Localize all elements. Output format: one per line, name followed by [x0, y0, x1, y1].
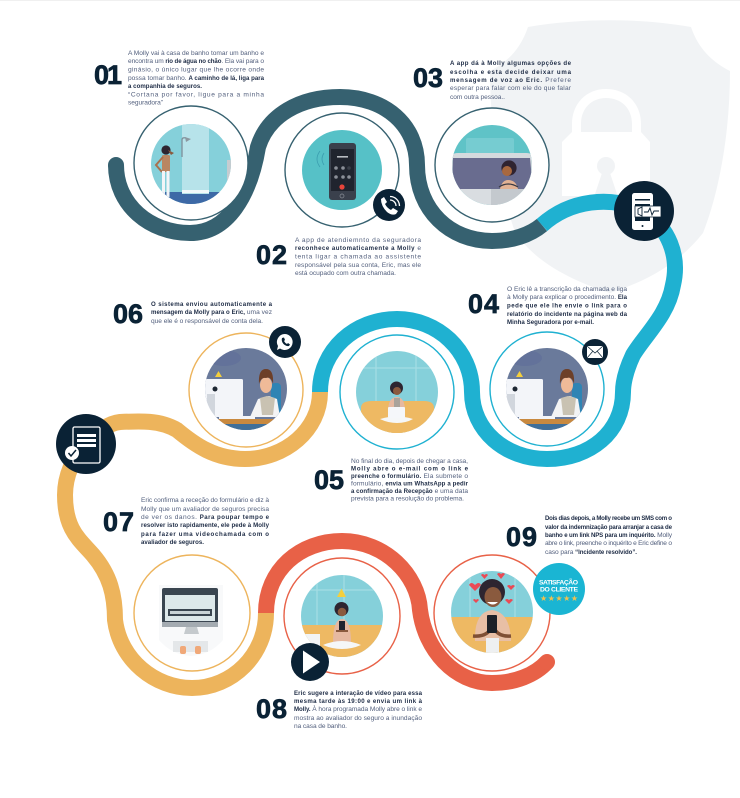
step 08 text: mostra ao avaliador do seguro a inundação	[294, 715, 422, 722]
step 06 text: O sistema enviou automaticamente a	[151, 301, 273, 308]
icon: hearts	[469, 573, 515, 604]
step 07 text: Molly que um avaliador de seguros precisa	[141, 506, 269, 513]
step 09 text: caso para “Incidente resolvido”.	[545, 549, 637, 556]
path segment: blue (steps 4-5)	[320, 202, 675, 459]
step 04 text: Minha Seguradora por e-mail.	[507, 319, 594, 326]
icon: sound waves	[317, 151, 324, 167]
step 09 text	[545, 515, 673, 556]
step 05 text: a confirmação da Recepção e uma data	[351, 488, 468, 495]
icon: video play button	[291, 643, 329, 681]
step 05 text: Molly abre o e-mail com o link e	[351, 466, 469, 472]
step 08 number: 08	[256, 694, 287, 724]
step 01 text: seguradora”	[128, 100, 163, 106]
step 04 number: 04	[468, 289, 499, 319]
step 01 illustration: flooded bathroom	[134, 106, 248, 220]
step 02 illustration: phone call	[285, 113, 399, 227]
step 02 text: reconhece automaticamente a Molly e	[295, 245, 421, 252]
icon: voice message on phone	[614, 181, 674, 241]
step 02 number: 02	[256, 240, 287, 270]
step 07 text: de ver os danos. Para poupar tempo e	[141, 514, 270, 521]
step 09 text: banho e um link NPS para um inquérito. Molly	[545, 532, 673, 539]
step 03 text: A app dá à Molly algumas opções de	[450, 60, 572, 67]
step 09 text: valor da indemnização para arranjar a casa de	[545, 524, 673, 531]
step 08 text: Molly. À hora programada Molly abre o link e	[294, 704, 422, 713]
step 03 text: com outra pessoa..	[450, 94, 505, 101]
icon: warning	[337, 588, 346, 597]
step 06 text	[151, 301, 273, 325]
step 09 number: 09	[506, 522, 537, 552]
icon: WhatsApp badge	[269, 326, 301, 358]
step 07 text: avaliador de seguros.	[141, 539, 204, 546]
step 05 number: 05	[314, 465, 344, 495]
step 03 text	[450, 60, 572, 101]
step 04 text	[507, 286, 628, 326]
step 07 number: 07	[103, 507, 134, 537]
step 02 text: responsável pela sua conta, Eric, mas ele	[295, 262, 421, 269]
step 01 number: 01	[94, 60, 122, 90]
step 05 text	[351, 458, 469, 502]
badge: customer satisfaction: SATISFAÇÃO	[539, 578, 578, 586]
step 04 text: relatório do incidente na página web da	[507, 311, 628, 318]
step 02 text: está ocupado com outra chamada.	[295, 270, 396, 277]
step 07 text	[141, 497, 270, 546]
step 08 text	[294, 690, 423, 730]
step 06 text: que ele é o responsável de conta dela.	[151, 318, 263, 325]
path segment: dark teal (steps 1-3)	[108, 97, 542, 241]
step 07 illustration: video call on computer	[134, 555, 250, 671]
step 01 text	[128, 50, 265, 106]
phone	[329, 143, 356, 200]
step 03 text: esperar para falar com ele do que falar	[450, 85, 572, 92]
step 05 illustration: Molly with laptop	[340, 335, 454, 449]
badge: customer satisfaction: ★★★★★	[540, 594, 578, 603]
step 03 text: mensagem de voz ao Eric. Prefere	[450, 77, 571, 84]
step 02 text: tenta ligar a chamada ao assistente	[295, 254, 421, 260]
icon: form with check mark	[56, 414, 116, 474]
path segment: yellow (steps 6-7)	[65, 392, 320, 688]
path segment: red (steps 8-9)	[266, 541, 555, 683]
step 01 text: A Molly vai à casa de banho tomar um banho e	[128, 50, 264, 57]
step 03 text: escolha e esta decide deixar uma	[450, 69, 572, 76]
step 07 text: Eric confirma a receção do formulário e diz à	[141, 497, 269, 504]
step 04 text: pede que ele lhe envie o link para o	[507, 302, 627, 310]
step 01 text: ginásio, o único lugar que lhe ocorre onde	[128, 66, 264, 74]
step 01 text: “Cortana por favor, ligue para a minha	[128, 92, 264, 98]
step 08 illustration: Molly filming with phone	[284, 558, 400, 674]
step 02 text	[295, 237, 421, 277]
step 05 text: No final do dia, depois de chegar a casa,	[351, 458, 468, 465]
step 03 number: 03	[413, 63, 443, 93]
step 02 text: A app de atendiemnto da seguradora	[295, 237, 421, 244]
step 05 text: preenche o formulário. Ela submete o	[351, 473, 468, 480]
step 07 text: para fazer uma videochamada com o	[141, 531, 269, 538]
step 05 text: prevista para a resolução do problema.	[351, 496, 464, 502]
badge: customer satisfaction: DO CLIENTE	[540, 586, 578, 594]
step 01 text: possa tomar banho. A caminho de lá, liga para	[128, 75, 265, 82]
step 07 text: resolver isto rapidamente, ele pede à Molly	[141, 522, 270, 529]
badge: customer satisfaction	[533, 563, 585, 615]
step 09 text: Dois dias depois, a Molly recebe um SMS com o	[545, 515, 672, 522]
background: security shield with padlock	[490, 20, 730, 293]
step 01 text: a companhia de seguros.	[128, 83, 202, 90]
step 04 text: à Molly para explicar o procedimento. Ela	[507, 294, 628, 301]
step 04 illustration: Eric at computer	[490, 332, 604, 446]
step 05 text: formulário, envia um WhatsApp a pedir	[351, 480, 469, 488]
step 09 illustration: happy Molly with hearts	[434, 555, 550, 671]
step 06 text: mensagem da Molly para o Eric, uma vez	[151, 309, 272, 316]
step 08 text: mesma tarde às 19:00 e envia um link à	[294, 698, 423, 705]
step 08 text: na casa de banho.	[294, 723, 347, 730]
step 09 text: abre o link, preenche o inquérito e Eric define o	[545, 540, 672, 547]
icon: envelope badge	[582, 339, 608, 365]
step 06 number: 06	[113, 299, 143, 329]
icon: phone call badge	[373, 189, 405, 221]
step 06 illustration: Eric at computer	[189, 333, 303, 447]
step 08 text: Eric sugere a interação de vídeo para essa	[294, 690, 423, 697]
step 01 text: encontra um rio de água no chão. Ela vai para o	[128, 58, 264, 65]
step 03 illustration: Molly driving	[435, 108, 549, 222]
step 04 text: O Eric lê a transcrição da chamada e liga	[507, 286, 627, 293]
